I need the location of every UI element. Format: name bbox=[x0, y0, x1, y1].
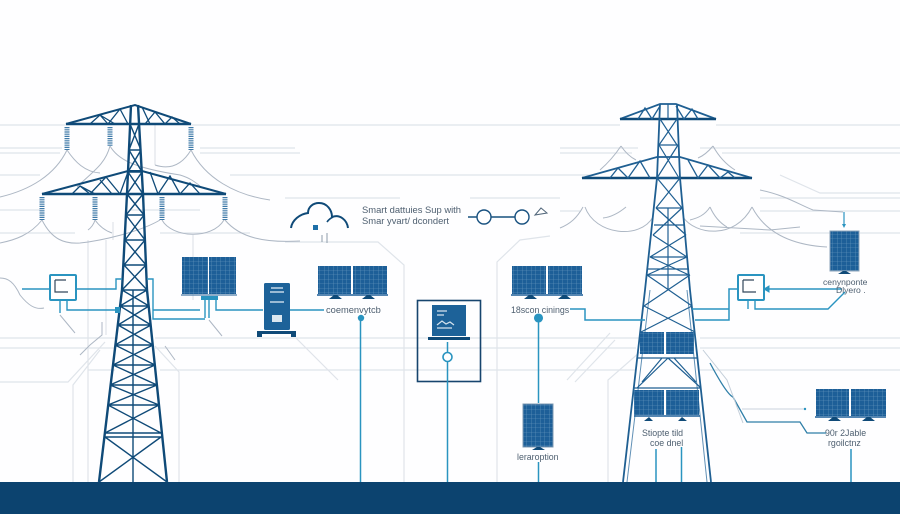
tower lattice bbox=[99, 124, 167, 482]
tower feed lines bbox=[656, 447, 682, 482]
left circuit branches bbox=[0, 278, 222, 360]
right transmission tower bbox=[582, 104, 752, 482]
solar panel: centre left bbox=[317, 266, 388, 299]
label: lower right: 90r 2Jable bbox=[825, 428, 866, 438]
heading text: Smar yvart/ dcondert bbox=[362, 215, 449, 226]
right junction box bbox=[692, 275, 845, 309]
cloud icon bbox=[291, 203, 348, 243]
solar panel: lower right bbox=[815, 389, 886, 421]
heading text: Smart dattuies Sup with bbox=[362, 204, 461, 215]
solar panel: far right portrait bbox=[830, 212, 859, 274]
label: centre left: coemenvytcb bbox=[326, 305, 381, 315]
heading text bbox=[362, 204, 461, 226]
left junction box bbox=[22, 275, 205, 319]
label: lower right: rgoilctnz bbox=[828, 438, 861, 448]
label: far right bbox=[823, 277, 868, 295]
left transmission tower bbox=[42, 105, 226, 482]
label: tower panels bbox=[642, 428, 683, 448]
tower legs bbox=[623, 104, 711, 482]
label: tower panels: coe dnel bbox=[650, 438, 683, 448]
connector: centre left bbox=[358, 315, 364, 482]
wires: right tower bbox=[560, 146, 843, 247]
ground band bbox=[0, 482, 900, 514]
insulators bbox=[42, 127, 225, 220]
upper cross arm bbox=[66, 105, 191, 124]
laptop icon bbox=[428, 305, 470, 340]
label: centre right: 18scon cinings bbox=[511, 305, 570, 315]
label: far right: Dlyero . bbox=[836, 285, 866, 295]
tower-mounted solar panels bbox=[634, 332, 700, 421]
solar panel: centre right bbox=[511, 266, 583, 299]
solar panel: portrait lower bbox=[523, 404, 553, 450]
connector: lower right bbox=[703, 350, 851, 482]
connector: centre right bbox=[535, 289, 738, 482]
lower cross arm bbox=[42, 171, 226, 194]
tower legs bbox=[99, 105, 167, 482]
label: portrait lower: leraroption bbox=[517, 452, 559, 462]
wires: left tower bbox=[0, 146, 300, 243]
label: far right: cenynponte bbox=[823, 277, 868, 287]
node connector icon bbox=[468, 208, 547, 224]
central control box bbox=[418, 300, 480, 482]
tower lattice bbox=[634, 104, 701, 388]
upper cross arm bbox=[620, 104, 716, 119]
solar panel: left bbox=[181, 257, 263, 318]
label: tower panels: Stiopte tild bbox=[642, 428, 683, 438]
label: lower right bbox=[825, 428, 866, 448]
lower cross arm bbox=[582, 157, 752, 178]
server cabinet bbox=[257, 283, 324, 337]
